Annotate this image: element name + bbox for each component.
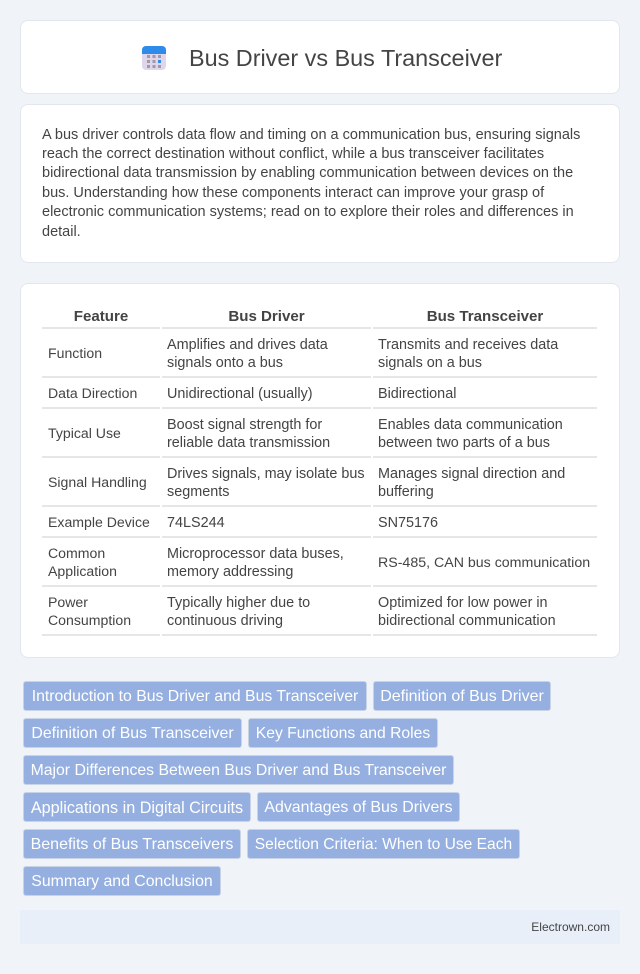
icon: calendar grid (142, 46, 166, 70)
table rows: signals on a bus (378, 355, 482, 371)
table rows: Example Device (48, 514, 150, 530)
table rows: between two parts of a bus (378, 435, 550, 451)
tag: selection criteria: Selection Criteria: When to Use Each (255, 836, 512, 853)
intro text: reach the correct destination without conflict, while a bus transceiver facilitates (42, 146, 544, 162)
table rows: segments (167, 484, 229, 500)
table rows: Application (48, 563, 117, 579)
tag: definition of bus transceiver (23, 718, 242, 748)
table rows: Power (48, 594, 88, 610)
table rows: Unidirectional (usually) (167, 386, 313, 402)
table rows: SN75176 (378, 515, 438, 531)
table rows: RS-485, CAN bus communication (378, 555, 590, 571)
footer source: Electrown.com (531, 920, 610, 934)
table rows: signals onto a bus (167, 355, 283, 371)
table rows: Common (48, 545, 105, 561)
table headers: Bus Driver (228, 308, 305, 325)
tag: key functions: Key Functions and Roles (256, 725, 430, 742)
table rows: buffering (378, 484, 434, 500)
tag: advantages: Advantages of Bus Drivers (264, 799, 453, 816)
tag: applications (23, 792, 251, 822)
tag: definition of bus transceiver: Definition of Bus Transceiver (31, 725, 234, 742)
topic tags (23, 681, 551, 896)
table rows: 74LS244 (167, 515, 225, 531)
intro text: A bus driver controls data flow and timing on a communication bus, ensuring signals (42, 126, 580, 142)
table rows: Typical Use (48, 425, 121, 441)
tag: major differences: Major Differences Between Bus Driver and Bus Transceiver (31, 762, 446, 779)
table rows: Typically higher due to (167, 595, 310, 611)
table headers (74, 308, 544, 325)
tag: benefits: Benefits of Bus Transceivers (31, 836, 233, 853)
table rows: Microprocessor data buses, (167, 546, 344, 562)
intro text (42, 126, 580, 240)
table rows: Manages signal direction and (378, 466, 565, 482)
intro card (20, 104, 620, 263)
tag: benefits (23, 829, 241, 859)
title card (20, 20, 620, 94)
table rows: bidirectional communication (378, 613, 556, 629)
intro text: bus. Understanding how these components interact can improve your grasp of (42, 185, 544, 201)
table rows: Function (48, 345, 102, 361)
table rows: Transmits and receives data (378, 337, 558, 353)
tag: advantages (257, 792, 460, 822)
table rows: Optimized for low power in (378, 595, 548, 611)
table rows: Amplifies and drives data (167, 337, 328, 353)
intro text: detail. (42, 224, 81, 240)
tag: key functions (248, 718, 438, 748)
tag: summary (23, 866, 221, 896)
footer bar (20, 910, 620, 944)
table headers: Feature (74, 308, 128, 325)
tag: introduction (23, 681, 367, 711)
tag: major differences (23, 755, 454, 785)
table rows: continuous driving (167, 613, 283, 629)
table headers: Bus Transceiver (427, 308, 543, 325)
table rows: Drives signals, may isolate bus (167, 466, 365, 482)
table rows: Enables data communication (378, 417, 563, 433)
tag: definition of bus driver (373, 681, 551, 711)
tag: summary: Summary and Conclusion (31, 873, 213, 890)
intro text: bidirectional data transmission by enabling communication between devices on the (42, 165, 573, 181)
table rows: Boost signal strength for (167, 417, 322, 433)
table rows: reliable data transmission (167, 435, 330, 451)
table rows: Signal Handling (48, 474, 147, 490)
intro text: electronic communication systems; read on to explore their roles and differences in (42, 204, 574, 220)
tag: introduction: Introduction to Bus Driver and Bus Transceiver (32, 688, 358, 705)
table rows: Bidirectional (378, 386, 456, 402)
table rows: Data Direction (48, 385, 137, 401)
table rows (42, 327, 597, 636)
table rows: memory addressing (167, 564, 293, 580)
tag: definition of bus driver: Definition of Bus Driver (380, 688, 544, 705)
table rows: Consumption (48, 612, 131, 628)
comparison table card (20, 283, 620, 658)
tag: applications: Applications in Digital Circuits (31, 799, 243, 817)
title: Bus Driver vs Bus Transceiver (189, 45, 502, 71)
tag: selection criteria (247, 829, 520, 859)
